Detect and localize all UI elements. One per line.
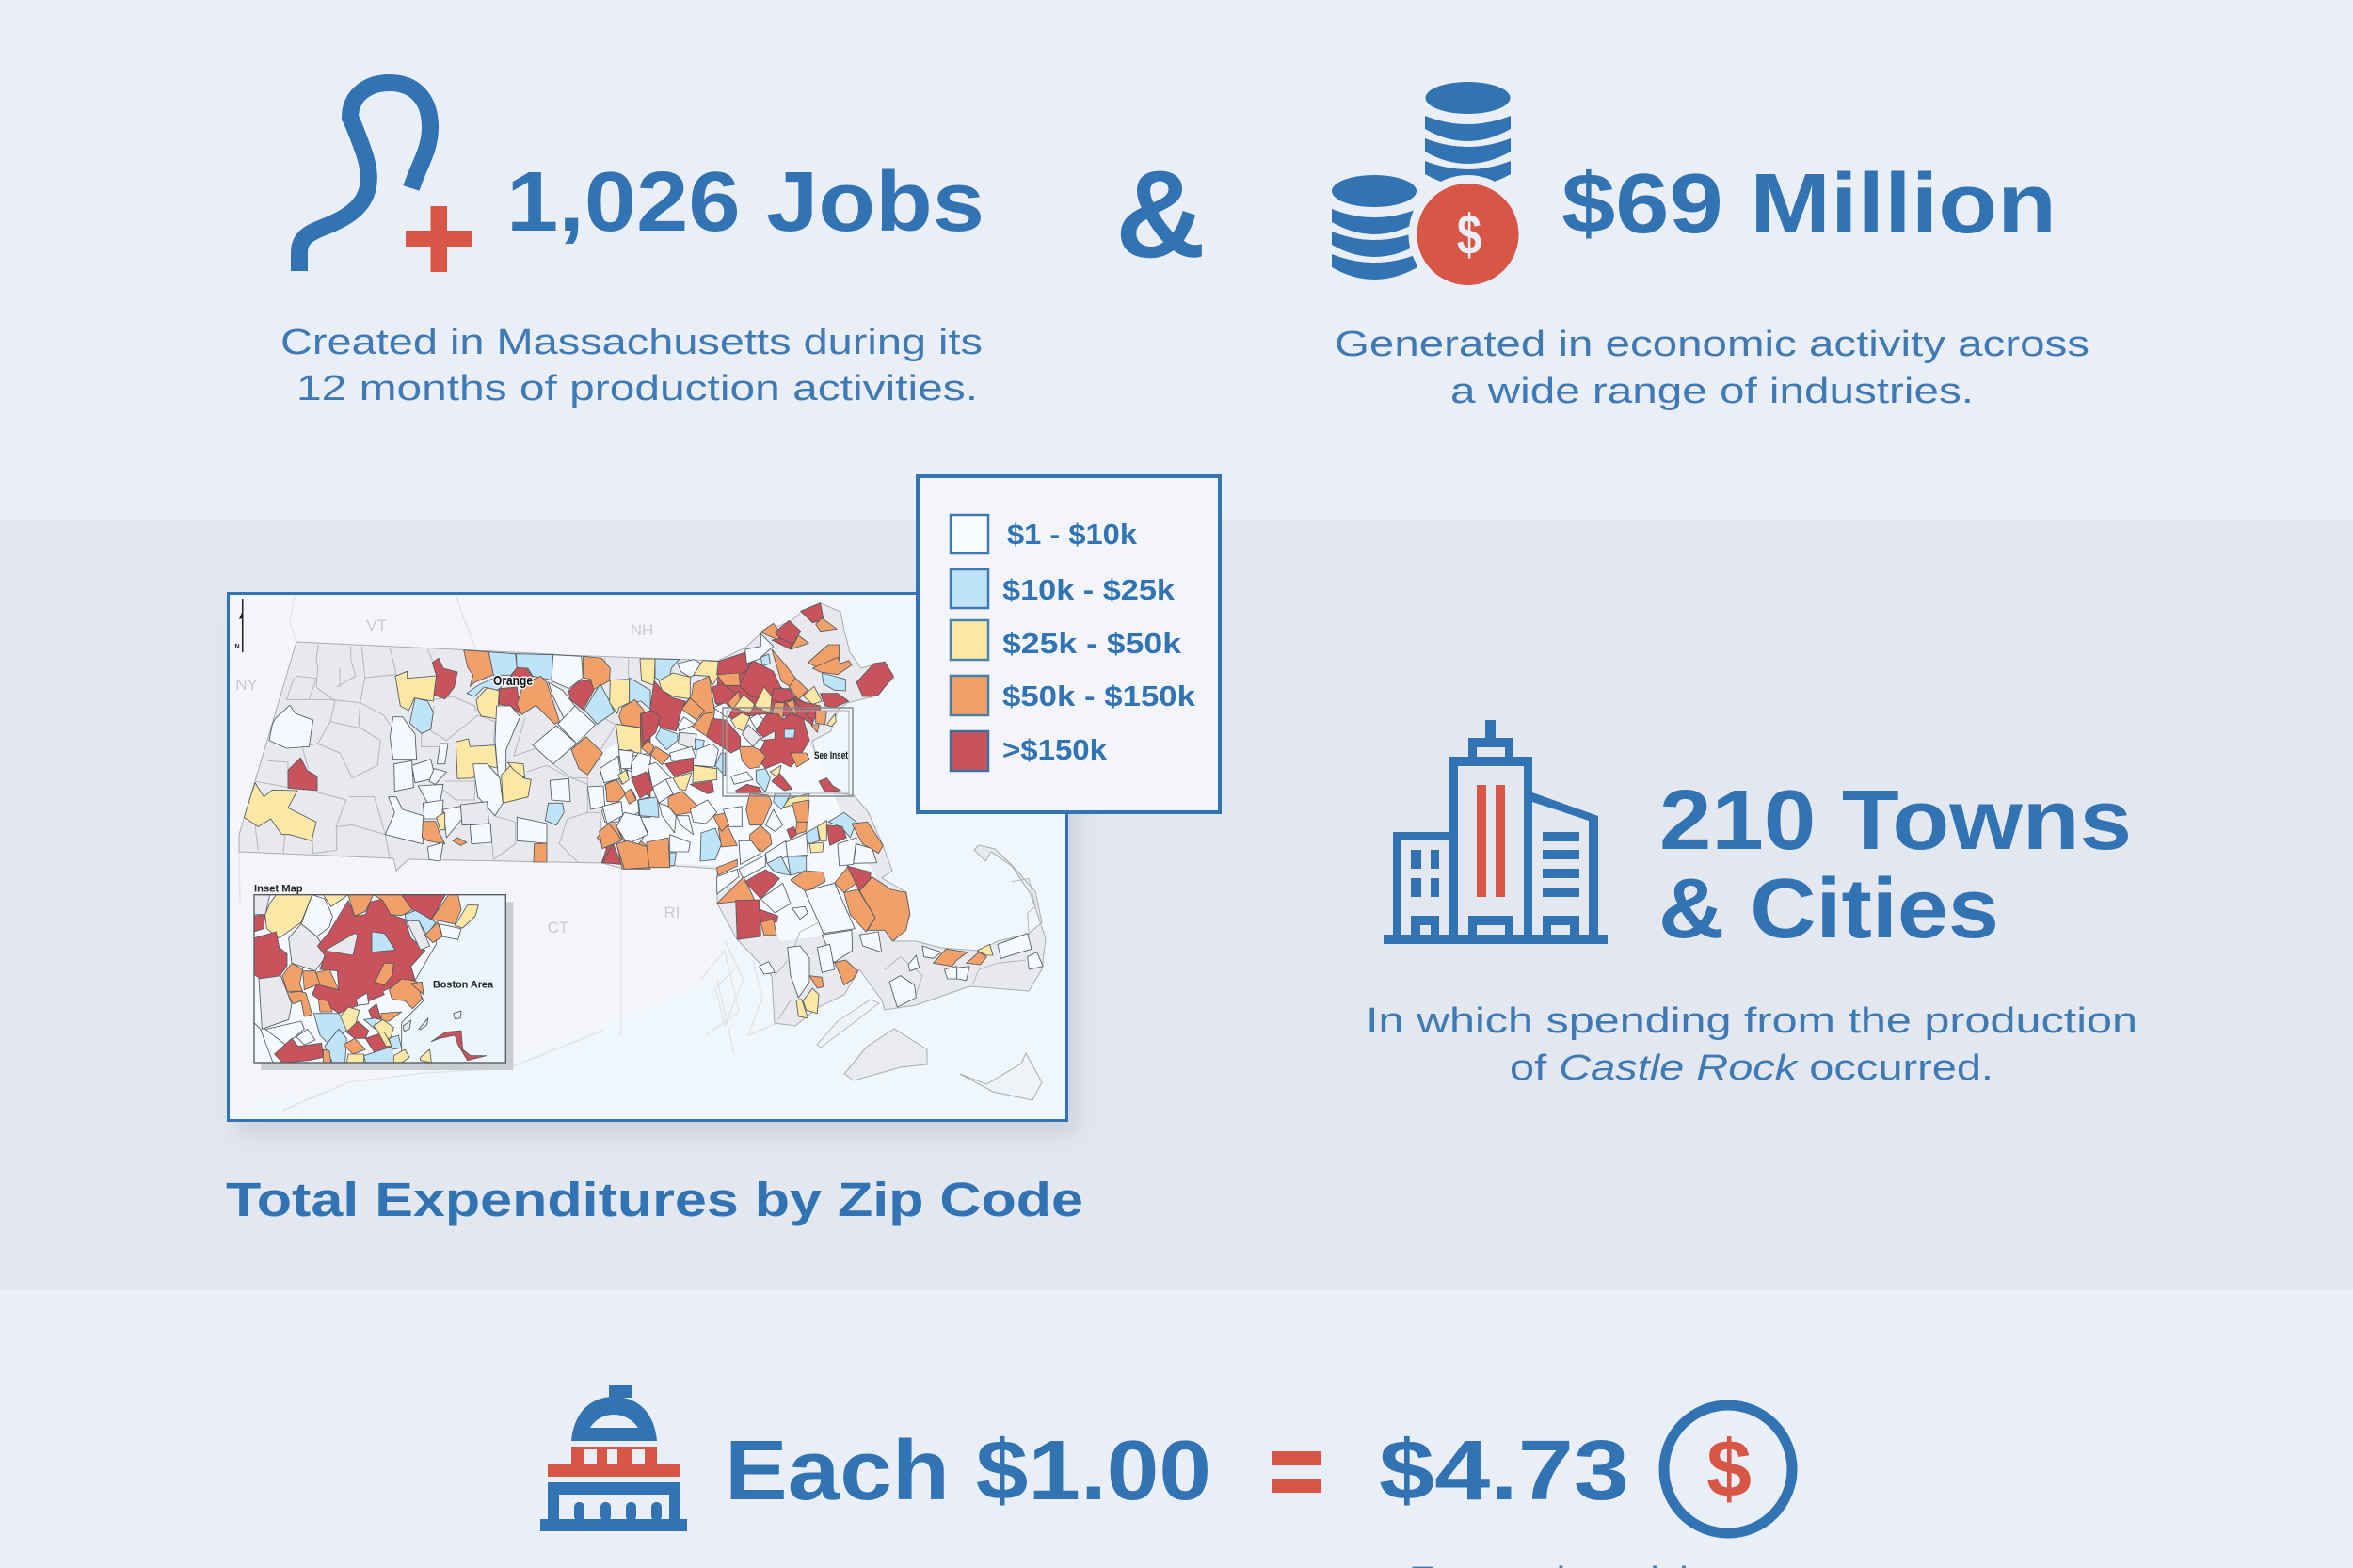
icon: dollar circle: $ — [1706, 1424, 1752, 1514]
map state labels: CT — [548, 919, 568, 936]
legend item: $50k - $150k — [951, 676, 1196, 715]
icon: city buildings — [1384, 720, 1608, 944]
icon: north arrow — [234, 599, 243, 652]
map state labels: RI — [664, 904, 680, 921]
panel: return on investment — [540, 1385, 1792, 1568]
islands — [817, 1000, 1042, 1100]
inset map: Boston area: Boston Area — [433, 979, 494, 990]
icon: north arrow: N — [234, 644, 240, 650]
text: towns description: of Castle Rock occurred. — [1510, 1048, 1993, 1088]
text: jobs description: 12 months of production activities. — [296, 369, 978, 408]
heading: 1,026 Jobs: 1,026 Jobs — [506, 155, 984, 249]
legend item: $10k - $25k: $10k - $25k — [1002, 573, 1176, 606]
panel: expenditure map — [227, 592, 1067, 1120]
icon: coin stacks — [1332, 82, 1527, 294]
panel: map legend — [918, 476, 1220, 812]
map state labels — [235, 616, 680, 936]
zip code polygons: south coast and Cape Cod — [717, 812, 1043, 1019]
map state labels: VT — [366, 616, 387, 634]
legend item: $50k - $150k: $50k - $150k — [1002, 680, 1196, 712]
legend item: >$150k: >$150k — [1002, 733, 1108, 766]
text: jobs description — [280, 323, 983, 408]
inset locator box — [723, 708, 853, 796]
legend item: >$150k — [951, 731, 1108, 771]
legend item: $25k - $50k: $25k - $50k — [1002, 627, 1182, 660]
heading: 210 Towns & Cities: 210 Towns — [1659, 774, 2132, 868]
ampersand connector: & — [1115, 145, 1206, 283]
panel: jobs stat — [280, 83, 984, 408]
legend item: $10k - $25k — [951, 569, 1176, 608]
inset locator box: See Inset — [814, 750, 848, 761]
map state labels: NY — [235, 676, 258, 694]
heading: $4.73: $4.73 — [1379, 1424, 1629, 1518]
state land base — [239, 603, 1046, 1026]
zip code polygons: western Massachusetts — [244, 645, 650, 869]
heading: $69 Million: $69 Million — [1561, 157, 2057, 251]
inset map: Boston area — [254, 883, 513, 1070]
icon: dollar circle — [1664, 1405, 1792, 1533]
panel: middle band background — [0, 520, 2353, 1289]
infographic canvas — [216, 74, 2135, 1568]
heading: Total Expenditures by Zip Code: Total Expenditures by Zip Code — [226, 1173, 1083, 1226]
heading: Each $1.00: Each $1.00 — [725, 1424, 1211, 1518]
legend item: $25k - $50k — [951, 620, 1182, 660]
icon: person with plus — [299, 83, 472, 272]
legend item: $1 - $10k: $1 - $10k — [1007, 518, 1138, 551]
text: economic activity description: a wide range of industries. — [1450, 372, 1974, 411]
map state labels: NH — [631, 621, 653, 639]
panel: towns and cities stat — [1366, 720, 2137, 1088]
text: jobs description: Created in Massachusetts during its — [280, 323, 983, 362]
icon: capitol building — [540, 1385, 687, 1531]
map shadow — [235, 612, 1078, 1134]
heading: 210 Towns & Cities: & Cities — [1658, 862, 1999, 956]
label: Orange: Orange — [493, 673, 533, 689]
heading: 210 Towns & Cities — [1658, 774, 2132, 956]
equals sign — [1272, 1451, 1321, 1493]
text: towns description: In which spending from the production — [1366, 1001, 2137, 1041]
text: economic activity description — [1335, 325, 2089, 411]
zip code polygons: eastern Massachusetts — [600, 603, 893, 869]
inset map: Boston area: Inset Map — [254, 883, 303, 894]
icon: coin stacks: $ — [1457, 203, 1481, 266]
text: economic activity description: Generated in economic activity across — [1335, 325, 2089, 364]
panel: economic activity stat — [1332, 82, 2089, 411]
legend item: $1 - $10k — [951, 515, 1138, 553]
text: towns description — [1366, 1001, 2137, 1088]
white underlay: eastern zip codes — [602, 692, 894, 941]
